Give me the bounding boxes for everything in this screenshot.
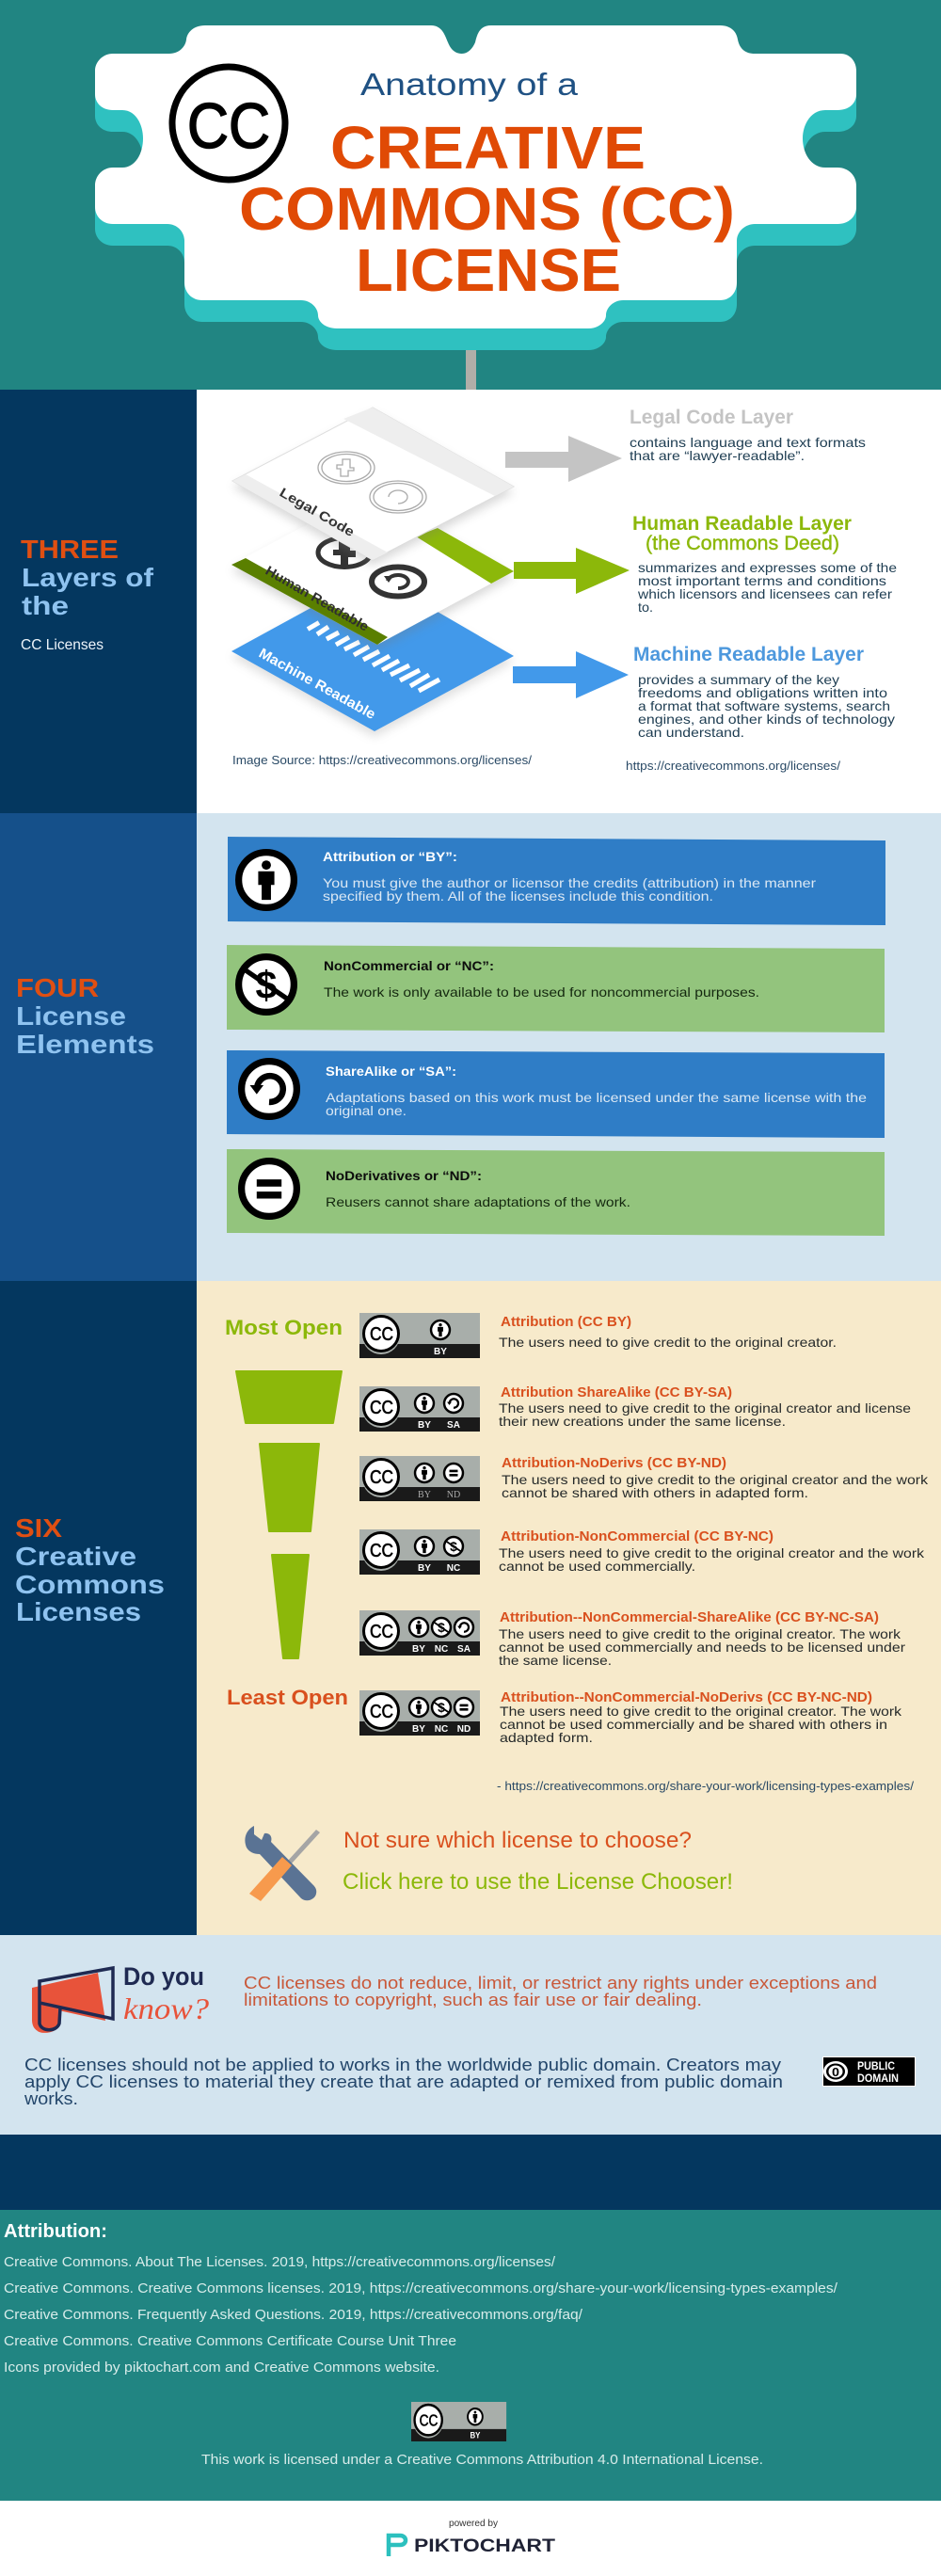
card: attribution: specified by them. All of the licenses include this condition.	[323, 888, 713, 904]
text: exceptions note: CC licenses do not reduce, limit, or restrict any rights under exceptions and	[244, 1973, 877, 1992]
badge: CC BY-NC-SA: SA	[457, 1644, 470, 1655]
title: Creative Commons (CC) License: LICENSE	[356, 236, 621, 304]
heading: four license elements	[16, 973, 154, 1059]
panel: footer	[0, 2501, 941, 2576]
heading: three layers of the CC licenses: the	[22, 591, 69, 620]
license: CC BY-NC-SA: the same license.	[499, 1653, 612, 1668]
arrow: machine readable	[513, 651, 629, 698]
badge: CC BY-NC-ND: ND	[457, 1724, 470, 1735]
heading: three layers of the CC licenses: THREE	[21, 535, 119, 564]
badge: CC BY-NC-SA: BY	[412, 1644, 425, 1655]
text: machine readable layer: provides a summary of the key	[638, 672, 839, 687]
text: human readable layer: to.	[638, 600, 653, 615]
arrow: legal code	[505, 436, 622, 482]
badge: public domain: 0	[832, 2065, 839, 2079]
heading: three layers of the CC licenses: Layers of	[22, 563, 154, 592]
badge: CC BY-NC: CC	[370, 1541, 393, 1561]
source: licenses link: - https://creativecommons.org/share-your-work/licensing-types-examples/	[497, 1779, 914, 1793]
source: layers link: https://creativecommons.org/licenses/	[626, 760, 841, 773]
heading: six creative commons licenses: Commons	[15, 1570, 165, 1599]
source: image source: Image Source: https://creativecommons.org/licenses/	[232, 754, 533, 767]
icon: noncommercial	[239, 957, 294, 1012]
text: public domain note	[24, 2055, 783, 2108]
icon: wrench and screwdriver	[245, 1826, 320, 1901]
badge: CC BY-NC: BY	[418, 1563, 431, 1574]
heading: four license elements: License	[16, 1001, 126, 1031]
badge: CC BY: BY	[434, 1347, 447, 1357]
heading: six creative commons licenses: Licenses	[16, 1597, 141, 1626]
badge: CC BY-NC-ND	[359, 1690, 480, 1736]
badge: CC BY-NC: NC	[447, 1563, 460, 1574]
badge: public domain: DOMAIN	[857, 2072, 899, 2085]
heading: six creative commons licenses	[15, 1513, 165, 1626]
badge: CC BY-SA: SA	[447, 1420, 460, 1431]
badge: CC BY-ND: ND	[447, 1490, 460, 1500]
license: CC BY-NC-ND: Attribution--NonCommercial-NoDerivs (CC BY-NC-ND)	[501, 1690, 872, 1705]
text: machine readable layer: engines, and other kinds of technology	[638, 712, 895, 727]
card: noderivatives	[227, 1149, 885, 1236]
license: CC BY-NC-ND: adapted form.	[500, 1730, 593, 1745]
text: references: Creative Commons. About The Licenses. 2019, https://creativecommons.org/licenses/	[4, 2254, 556, 2270]
badge: CC BY-SA	[359, 1386, 480, 1432]
icon: noderivatives	[242, 1161, 296, 1216]
license: CC BY-ND: The users need to give credit to the original creator and the work	[502, 1472, 929, 1487]
call to action: not sure which license: Not sure which license to choose?	[343, 1828, 692, 1853]
text: human readable layer: summarizes and expresses some of the	[638, 560, 897, 575]
license: CC BY-NC: Attribution-NonCommercial (CC BY-NC)	[501, 1529, 774, 1544]
badge: CC BY-NC-ND: BY	[412, 1724, 425, 1735]
badge: CC BY-NC-ND: $	[438, 1700, 445, 1715]
badge: CC BY-NC-ND: CC	[370, 1702, 393, 1722]
badge: CC BY-NC-SA	[359, 1610, 480, 1656]
panel: six licenses	[0, 1281, 941, 1935]
card: noncommercial	[227, 945, 885, 1032]
license: CC BY-NC-ND	[500, 1690, 902, 1745]
icon: sharealike	[242, 1062, 296, 1116]
text: machine readable layer: can understand.	[638, 725, 744, 740]
label: least open: Least Open	[227, 1686, 348, 1709]
text: references: Creative Commons. Creative Commons licenses. 2019, https://creativecommons.org/share-your-work/licensing-types-examples/	[4, 2280, 838, 2296]
text: human readable layer: which licensors and licensees can refer	[637, 586, 892, 601]
badge: CC BY-NC	[359, 1529, 480, 1575]
badge: public domain	[822, 2057, 915, 2086]
sign shadow	[95, 47, 856, 350]
badge: CC BY footer: BY	[470, 2430, 481, 2440]
card: noncommercial: NonCommercial or “NC”:	[324, 958, 494, 973]
card: sharealike: Adaptations based on this work must be licensed under the same license with the	[326, 1090, 867, 1105]
icon: piktochart logo	[389, 2536, 406, 2556]
signpost pole	[466, 339, 476, 390]
label: most open: Most Open	[225, 1316, 343, 1339]
text: legal code layer: that are “lawyer-readable”.	[630, 448, 805, 463]
card: attribution: Attribution or “BY”:	[323, 849, 457, 864]
panel: four license elements	[0, 813, 941, 1281]
text: human readable layer	[632, 513, 897, 615]
license: CC BY-NC: cannot be used commercially.	[499, 1559, 695, 1574]
license: CC BY-NC-SA	[499, 1610, 905, 1668]
badge: CC BY footer	[411, 2402, 506, 2441]
badge: CC BY-NC-SA: NC	[435, 1644, 448, 1655]
badge: CC BY-NC-SA: CC	[370, 1622, 393, 1642]
card: sharealike: original one.	[326, 1103, 407, 1118]
card: sharealike: ShareAlike or “SA”:	[326, 1064, 456, 1079]
arrow: human readable	[514, 548, 630, 594]
license: CC BY-ND: Attribution-NoDerivs (CC BY-ND)	[502, 1456, 726, 1471]
layer: machine readable card: Machine Readable	[256, 646, 378, 723]
card: attribution: You must give the author or licensor the credits (attribution) in the manner	[323, 875, 816, 890]
license: CC BY: Attribution (CC BY)	[501, 1315, 631, 1330]
layer: machine readable card	[231, 574, 514, 737]
license: CC BY-NC-SA: Attribution--NonCommercial-ShareAlike (CC BY-NC-SA)	[500, 1610, 879, 1625]
text: human readable layer: Human Readable Layer	[632, 513, 852, 535]
badge: CC BY-ND: BY	[418, 1490, 431, 1500]
card: attribution	[228, 837, 885, 925]
text: legal code layer: contains language and text formats	[630, 435, 866, 450]
title: Anatomy of a: Anatomy of a	[360, 67, 579, 102]
license: CC BY-SA: their new creations under the same license.	[499, 1414, 786, 1429]
license: CC BY-ND: cannot be shared with others in adapted form.	[502, 1485, 808, 1500]
text: legal code layer: Legal Code Layer	[630, 407, 793, 428]
call to action: license chooser: Click here to use the License Chooser!	[343, 1869, 733, 1895]
layer: human readable card: Human Readable	[263, 563, 372, 634]
text: machine readable layer: a format that software systems, search	[638, 698, 890, 713]
heading: do you know: know?	[123, 1992, 209, 2025]
heading: three layers of the CC licenses: CC Licenses	[21, 637, 104, 653]
badge: CC BY-SA: CC	[370, 1398, 393, 1418]
badge: CC BY-NC-ND: NC	[435, 1724, 448, 1735]
panel: hero header	[0, 0, 941, 390]
license: CC BY-NC-ND: cannot be used commercially and be shared with others in	[500, 1717, 887, 1732]
license: CC BY-NC-ND: The users need to give credit to the original creator. The work	[500, 1704, 902, 1719]
badge: CC BY-ND: CC	[370, 1467, 393, 1488]
license: CC BY-SA: The users need to give credit to the original creator and license	[499, 1400, 911, 1416]
text: machine readable layer: freedoms and obligations written into	[638, 685, 887, 700]
text: exceptions note: limitations to copyright, such as fair use or fair dealing.	[244, 1990, 702, 2009]
heading: four license elements: Elements	[16, 1030, 154, 1059]
title: Creative Commons (CC) License: COMMONS (CC)	[239, 175, 735, 243]
text: exceptions note	[244, 1973, 877, 2009]
icon: CC logo	[172, 67, 285, 180]
panel: do you know	[0, 1935, 941, 2135]
chart: openness funnel	[236, 1371, 342, 1658]
layer: human readable card	[231, 489, 514, 650]
title: Creative Commons (CC) License: CREATIVE	[330, 114, 646, 182]
text: human readable layer: most important terms and conditions	[638, 573, 886, 588]
badge: CC BY-ND	[359, 1456, 480, 1501]
license: CC BY-NC-SA: The users need to give credit to the original creator. The work	[499, 1626, 901, 1641]
text: machine readable layer: Machine Readable Layer	[633, 644, 864, 665]
license: CC BY-SA: Attribution ShareAlike (CC BY-SA)	[501, 1385, 732, 1400]
badge: CC BY footer: CC	[420, 2411, 438, 2430]
badge: CC BY	[359, 1313, 480, 1358]
badge: CC BY-NC-SA: $	[438, 1620, 445, 1635]
text: powered by: powered by	[449, 2518, 499, 2529]
text: references: Creative Commons. Frequently Asked Questions. 2019, https://creativecommons.org/faq/	[4, 2307, 583, 2323]
text: references: Creative Commons. Creative Commons Certificate Course Unit Three	[4, 2333, 456, 2349]
text: legal code layer	[630, 407, 866, 463]
badge: CC BY-NC: $	[450, 1539, 457, 1554]
text: license statement: This work is licensed under a Creative Commons Attribution 4.0 International License.	[201, 2452, 763, 2468]
license: CC BY-SA	[499, 1385, 911, 1429]
text: public domain note: apply CC licenses to material they create that are adapted or remixed from public domain	[24, 2072, 783, 2091]
badge: public domain: PUBLIC	[857, 2059, 895, 2072]
license: CC BY	[499, 1315, 837, 1350]
layer: legal code card: Legal Code	[277, 485, 358, 539]
license: CC BY-NC-SA: cannot be used commercially and needs to be licensed under	[499, 1640, 905, 1655]
badge: CC BY-SA: BY	[418, 1420, 431, 1431]
text: human readable layer: (the Commons Deed)	[646, 533, 839, 554]
text: public domain note: works.	[24, 2088, 78, 2108]
band: navy divider	[0, 2135, 941, 2210]
card: noncommercial: The work is only available to be used for noncommercial purposes.	[324, 984, 759, 1000]
heading: do you know: Do you	[123, 1962, 204, 1991]
heading: do you know	[123, 1962, 209, 2025]
title: Creative Commons (CC) License	[239, 114, 735, 304]
text: references	[4, 2254, 838, 2376]
heading: six creative commons licenses: Creative	[15, 1542, 136, 1571]
license: CC BY: The users need to give credit to the original creator.	[499, 1335, 837, 1350]
card: noderivatives: Reusers cannot share adaptations of the work.	[326, 1194, 630, 1209]
license: CC BY-NC: The users need to give credit to the original creator and the work	[499, 1545, 925, 1560]
text: piktochart: PIKTOCHART	[414, 2536, 555, 2556]
icon: megaphone	[32, 1968, 113, 2033]
card: noderivatives: NoDerivatives or “ND”:	[326, 1168, 482, 1183]
text: references: Icons provided by piktochart.com and Creative Commons website.	[4, 2360, 439, 2376]
license: CC BY-NC	[499, 1529, 925, 1574]
heading: attribution: Attribution:	[4, 2221, 107, 2242]
license: CC BY-ND	[502, 1456, 929, 1500]
icon: CC logo: CC	[187, 90, 270, 162]
text: public domain note: CC licenses should not be applied to works in the worldwide public domain. Creators may	[24, 2055, 782, 2074]
sign board	[95, 25, 856, 328]
heading: six creative commons licenses: SIX	[15, 1513, 62, 1543]
badge: CC BY: CC	[370, 1324, 393, 1345]
icon: attribution	[239, 853, 294, 907]
panel: three layers	[0, 390, 941, 813]
text: machine readable layer	[633, 644, 895, 740]
panel: attribution	[0, 2210, 941, 2501]
layer: legal code card	[232, 408, 514, 566]
heading: three layers of the CC licenses	[21, 535, 154, 653]
card: sharealike	[227, 1050, 885, 1138]
heading: four license elements: FOUR	[16, 973, 99, 1002]
icon: noncommercial: $	[256, 964, 278, 1007]
